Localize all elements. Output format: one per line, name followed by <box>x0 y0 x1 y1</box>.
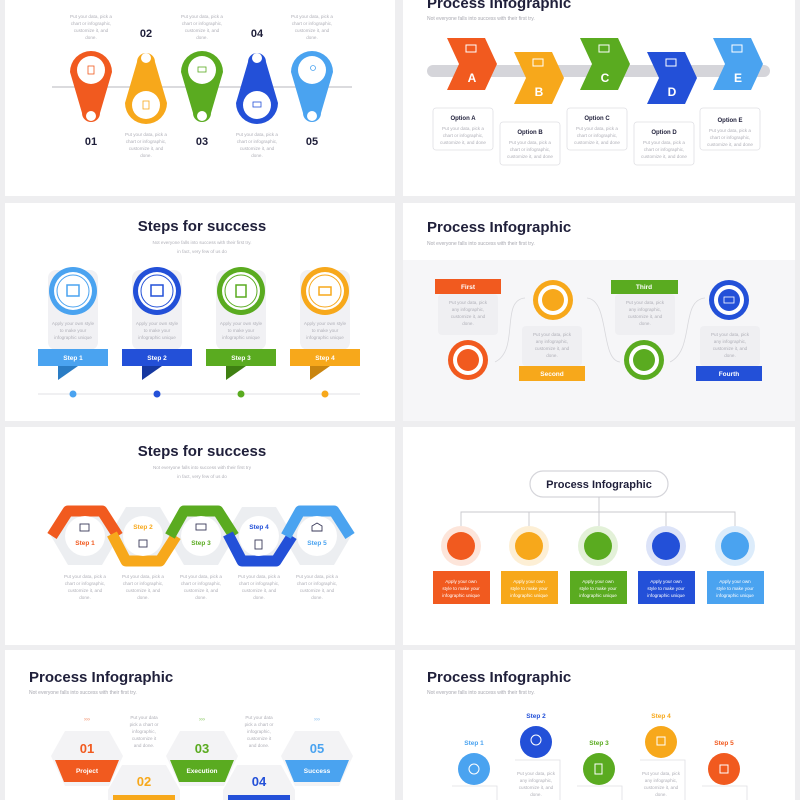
descriptions: customize it, and <box>295 28 330 33</box>
panel: step circles: Step 5 <box>714 740 734 747</box>
panel: chevron process: Put your data, pick a <box>442 126 484 131</box>
panel: hexagon process: 04 <box>252 774 267 789</box>
descriptions: Put your data, pick a <box>125 132 167 137</box>
panel: chevron process: customize it, and done <box>641 154 687 159</box>
descriptions: chart or infographic, <box>237 139 277 144</box>
panel: chevron process: Option E <box>718 118 742 124</box>
panel: hexagon process: ››› <box>199 717 205 723</box>
panel: chevron process: Option C <box>584 116 610 122</box>
hex bands: Success <box>304 768 331 775</box>
pin 2 <box>125 53 167 124</box>
panel: process infographic circles: done. <box>639 321 651 326</box>
panel: hexagon process <box>5 650 395 800</box>
panel: steps wave: Put your data, pick a <box>122 574 164 579</box>
panel: hexagon process: ››› <box>84 717 90 723</box>
panel: process infographic circles: any infographic, <box>714 339 746 344</box>
descriptions: done. <box>196 35 208 40</box>
panel: tree diagram: style to make your <box>647 586 685 591</box>
panel: steps for success (ribbons): Apply your own style <box>220 321 263 326</box>
panel: steps wave: Step 5 <box>307 540 327 547</box>
panel: step circles: Put your data, pick <box>517 771 556 776</box>
panel: steps for success (ribbons): infographic unique <box>306 335 344 340</box>
panel: steps wave: in fact, very few of us do <box>177 474 227 479</box>
panel: hexagon process: customize it <box>247 736 272 741</box>
panel: steps wave <box>5 427 395 645</box>
labels: First <box>461 284 476 291</box>
panel: step circles: done. <box>655 792 667 797</box>
panel: tree diagram: Process Infographic <box>546 479 652 491</box>
panel: chevron process: customize it, and done <box>507 154 553 159</box>
panel: process infographic circles: Put your data, pick <box>449 300 488 305</box>
panel: chevron process: Option B <box>517 130 543 136</box>
panel: step circles: Not everyone falls into success with their first try. <box>427 690 535 696</box>
panel: tree diagram: infographic unique <box>579 593 617 598</box>
panel: step circles: Step 1 <box>464 740 484 747</box>
panel: tree diagram: Apply your own <box>719 579 751 584</box>
panel: process infographic circles: customize it, and <box>713 346 748 351</box>
numbers: 04 <box>251 28 264 40</box>
ribbons <box>38 349 360 380</box>
panel: chevron process: Put your data, pick a <box>709 128 751 133</box>
panel: steps for success (ribbons) <box>5 203 395 421</box>
panel: process infographic circles: Put your data, pick <box>533 332 572 337</box>
descriptions: done. <box>85 35 97 40</box>
panel: steps wave: Step 4 <box>249 524 269 531</box>
panel: hexagon process: infographic, <box>247 729 271 734</box>
panel: hexagon process: 01 <box>80 741 94 756</box>
panel: steps wave: Put your data, pick a <box>296 574 338 579</box>
panel: hexagon process: 02 <box>137 774 151 789</box>
panel: chevron process: Not everyone falls into success with their first try. <box>427 16 535 22</box>
wave bands <box>52 511 350 561</box>
panel: hexagon process: pick a chart or <box>130 722 159 727</box>
numbers <box>85 28 318 148</box>
labels: Fourth <box>719 371 739 378</box>
panel: chevron process: chart or infographic, <box>644 147 684 152</box>
descriptions: customize it, and <box>74 28 109 33</box>
panel: steps wave: done. <box>79 595 91 600</box>
panel: process infographic circles: Put your data, pick <box>626 300 665 305</box>
panel: steps for success (ribbons): infographic unique <box>138 335 176 340</box>
panel: steps for success (ribbons): to make your <box>60 328 87 333</box>
panel: chevron process: chart or infographic, <box>577 133 617 138</box>
labels: Third <box>636 284 652 291</box>
panel: hexagon process: pick a chart or <box>245 722 274 727</box>
panel: hexagon process: Process Infographic <box>29 669 173 686</box>
panel: steps wave: customize it, and <box>126 588 161 593</box>
descriptions: Put your data, pick a <box>236 132 278 137</box>
descriptions: Put your data, pick a <box>291 14 333 19</box>
panel: tree diagram <box>403 427 795 645</box>
panel: chevron process: customize it, and done <box>574 140 620 145</box>
panel: tree diagram: infographic unique <box>716 593 754 598</box>
panel: steps wave: done. <box>137 595 149 600</box>
panel: step circles: any infographic, <box>645 778 677 783</box>
panel: process infographic circles: Process Infographic <box>427 219 571 236</box>
hex bands <box>55 760 349 800</box>
panel: steps for success (ribbons): to make your <box>312 328 339 333</box>
panel: step circles: any infographic, <box>520 778 552 783</box>
panel: step circles: Put your data, pick <box>642 771 681 776</box>
panel: steps wave: Steps for success <box>138 443 266 460</box>
panel: chevron process: Put your data, pick a <box>509 140 551 145</box>
panel: process infographic circles: any infographic, <box>452 307 484 312</box>
chevrons: C <box>601 71 610 85</box>
pin 5 <box>291 51 333 122</box>
panel: steps for success (ribbons): Apply your own style <box>304 321 347 326</box>
panel: tree diagram: style to make your <box>579 586 617 591</box>
panel: steps for success (ribbons): infographic unique <box>54 335 92 340</box>
panel: hexagon process: 05 <box>310 741 324 756</box>
ribbons: Step 1 <box>63 355 83 362</box>
panel: tree diagram: Apply your own <box>513 579 545 584</box>
panel: chevron process: chart or infographic, <box>443 133 483 138</box>
panel: process infographic circles: customize it, and <box>628 314 663 319</box>
panel: tree diagram: Apply your own <box>445 579 477 584</box>
panel: steps for success (ribbons): in fact, very few of us do <box>177 249 227 254</box>
panel: steps wave: chart or infographic, <box>123 581 163 586</box>
panel: steps wave: customize it, and <box>184 588 219 593</box>
descriptions: chart or infographic, <box>71 21 111 26</box>
panel: tree diagram: style to make your <box>442 586 480 591</box>
panel: hexagon process: Not everyone falls into success with their first try. <box>29 690 137 696</box>
panel: steps wave: chart or infographic, <box>297 581 337 586</box>
panel: steps wave: customize it, and <box>300 588 335 593</box>
panel: step circles <box>403 650 795 800</box>
panel: process infographic circles: Not everyone falls into success with their first try. <box>427 241 535 247</box>
numbers: 01 <box>85 136 97 148</box>
panel: step circles: Step 3 <box>589 740 609 747</box>
descriptions: chart or infographic, <box>182 21 222 26</box>
descriptions: done. <box>251 153 263 158</box>
panel: tree diagram: style to make your <box>510 586 548 591</box>
descriptions: customize it, and <box>129 146 164 151</box>
descriptions: chart or infographic, <box>292 21 332 26</box>
panel: step circles: done. <box>530 792 542 797</box>
panel: hexagon process: Put your data <box>130 715 158 720</box>
descriptions: customize it, and <box>240 146 275 151</box>
chevrons: E <box>734 71 742 85</box>
panel: step circles: Step 4 <box>651 713 671 720</box>
chevrons: B <box>535 85 544 99</box>
option boxes <box>433 108 760 165</box>
panel: steps wave: Step 3 <box>191 540 211 547</box>
panel: tree diagram: Apply your own <box>650 579 682 584</box>
panel: steps wave: done. <box>195 595 207 600</box>
panel: hexagon process: and done. <box>134 743 154 748</box>
panel: steps for success (ribbons): Steps for success <box>138 218 266 235</box>
panel: chevron process: customize it, and done <box>440 140 486 145</box>
hex bands: Project <box>76 768 99 775</box>
panel: chevron process: Option A <box>450 116 476 122</box>
panel: tree diagram: infographic unique <box>442 593 480 598</box>
panel: steps wave: chart or infographic, <box>65 581 105 586</box>
pin 4 <box>236 53 278 124</box>
panel: hexagon process: customize it <box>132 736 157 741</box>
panel: steps wave: done. <box>311 595 323 600</box>
pin 1 <box>70 51 112 122</box>
panel: step circles: customize it, and <box>644 785 679 790</box>
panel: steps for success (ribbons): to make your <box>228 328 255 333</box>
panel: chevron process: Put your data, pick a <box>643 140 685 145</box>
descriptions: Put your data, pick a <box>181 14 223 19</box>
hex bands: Execution <box>186 768 218 775</box>
panel: steps for success (ribbons): to make your <box>144 328 171 333</box>
panel: tree diagram: style to make your <box>716 586 754 591</box>
descriptions: done. <box>140 153 152 158</box>
labels: Second <box>540 371 564 378</box>
panel: pin timeline <box>5 0 395 196</box>
panel: chevron process: Option D <box>651 130 677 136</box>
panel: chevron process <box>403 0 795 196</box>
descriptions <box>70 14 333 158</box>
panel: process infographic circles: done. <box>462 321 474 326</box>
step circles <box>49 267 349 315</box>
pin 3 <box>181 51 223 122</box>
descriptions: chart or infographic, <box>126 139 166 144</box>
panel: steps wave: Not everyone falls into success with their first try <box>153 465 252 470</box>
panel: steps wave: Put your data, pick a <box>238 574 280 579</box>
labels <box>435 279 762 381</box>
numbers: 02 <box>140 28 152 40</box>
panel: step circles: Step 2 <box>526 713 546 720</box>
panel: process infographic circles <box>403 203 795 421</box>
panel: hexagon process: 03 <box>195 741 209 756</box>
panel: steps wave: Step 2 <box>133 524 153 531</box>
numbers: 05 <box>306 136 318 148</box>
panel: process infographic circles: done. <box>724 353 736 358</box>
panel: hexagon process: infographic, <box>132 729 156 734</box>
panel: tree diagram: Apply your own <box>582 579 614 584</box>
panel: step circles: customize it, and <box>519 785 554 790</box>
panel: process infographic circles: Put your data, pick <box>711 332 750 337</box>
panel: steps wave: chart or infographic, <box>181 581 221 586</box>
chevrons <box>447 38 763 104</box>
panel: step circles: Process Infographic <box>427 669 571 686</box>
panel: process infographic circles: customize it, and <box>535 346 570 351</box>
chevrons: A <box>468 71 477 85</box>
panel: steps for success (ribbons): Apply your own style <box>52 321 95 326</box>
descriptions: customize it, and <box>185 28 220 33</box>
ribbons: Step 3 <box>231 355 251 362</box>
panel: steps for success (ribbons): Not everyone falls into success with their first try. <box>153 240 251 245</box>
panel: process infographic circles: done. <box>546 353 558 358</box>
panel: process infographic circles: customize it, and <box>451 314 486 319</box>
panel: steps wave: Step 1 <box>75 540 95 547</box>
panel: chevron process: chart or infographic, <box>510 147 550 152</box>
panel: steps wave: customize it, and <box>242 588 277 593</box>
descriptions: Put your data, pick a <box>70 14 112 19</box>
panel: steps wave: customize it, and <box>68 588 103 593</box>
panel: tree diagram: infographic unique <box>510 593 548 598</box>
panel: process infographic circles: any infographic, <box>629 307 661 312</box>
panel: hexagon process: and done. <box>249 743 269 748</box>
panel: hexagon process: Put your data <box>245 715 273 720</box>
panel: steps wave: Put your data, pick a <box>180 574 222 579</box>
chevrons: D <box>668 85 677 99</box>
numbers: 03 <box>196 136 208 148</box>
panel: chevron process: Put your data, pick a <box>576 126 618 131</box>
panel: steps for success (ribbons): infographic unique <box>222 335 260 340</box>
panel: hexagon process: ››› <box>314 717 320 723</box>
panel: process infographic circles: any infographic, <box>536 339 568 344</box>
panel: steps wave: Put your data, pick a <box>64 574 106 579</box>
descriptions: done. <box>306 35 318 40</box>
panel: steps wave: done. <box>253 595 265 600</box>
ribbons: Step 4 <box>315 355 335 362</box>
panel: tree diagram: infographic unique <box>647 593 685 598</box>
ribbons: Step 2 <box>147 355 167 362</box>
panel: steps wave: chart or infographic, <box>239 581 279 586</box>
panel: steps for success (ribbons): Apply your own style <box>136 321 179 326</box>
panel: chevron process: chart or infographic, <box>710 135 750 140</box>
panel: chevron process: customize it, and done <box>707 142 753 147</box>
